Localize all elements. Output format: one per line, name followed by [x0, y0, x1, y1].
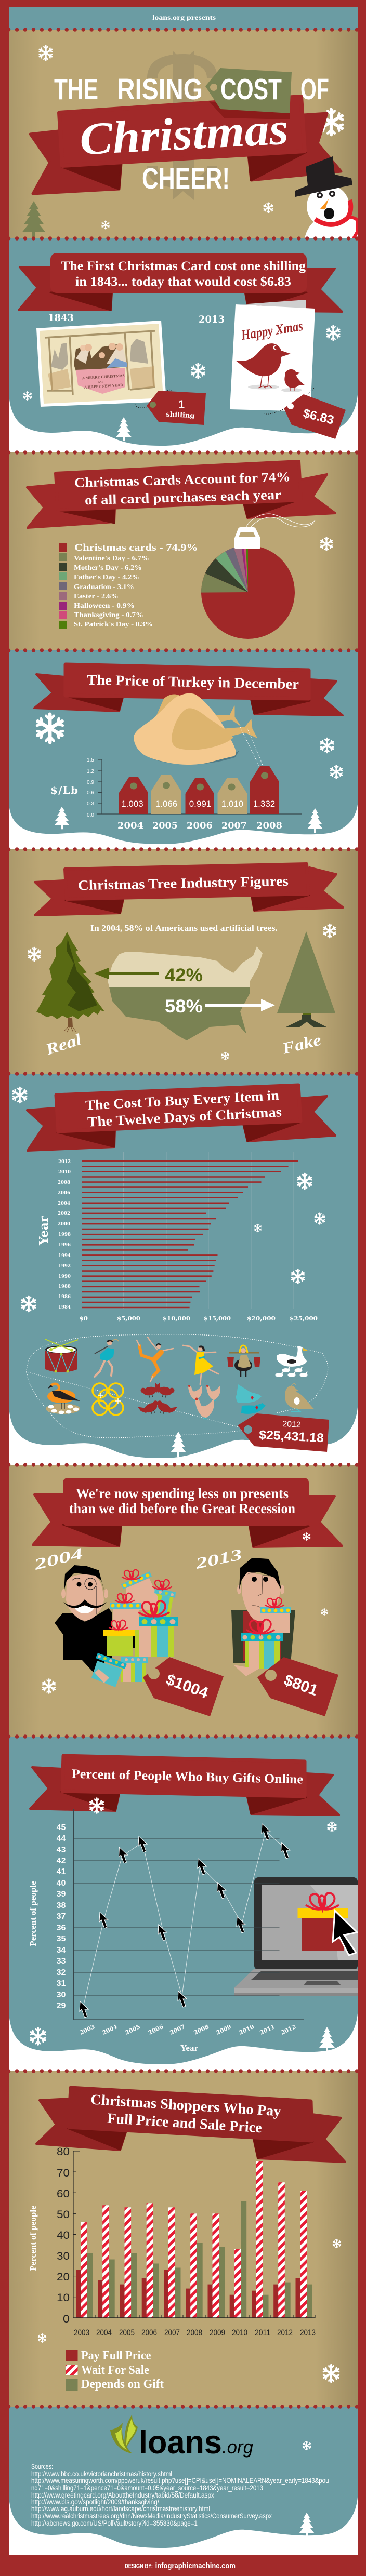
ribbon heading: of all card purchases each year: [85, 487, 281, 508]
line chart: 37: [57, 1912, 66, 1921]
icons: trees: [54, 807, 323, 833]
label: real: Real: [43, 1030, 84, 1059]
logo: loans.org: loans: [139, 2424, 222, 2461]
ribbon heading: Percent of People Who Buy Gifts Online: [72, 1767, 303, 1786]
bar chart: price tags: 0.0: [87, 812, 94, 818]
illustration: 2013 card: Happy Xmas: [240, 318, 304, 343]
snowflakes: [13, 1088, 324, 1311]
bar chart: cost by year: 2010: [58, 1169, 71, 1175]
icon: turtle doves: [236, 1384, 266, 1414]
bar chart: cost by year: 2004: [58, 1200, 70, 1206]
bar chart: cost by year: $0: [79, 1315, 88, 1322]
bar chart: shoppers: 80: [57, 2146, 70, 2158]
panel: first christmas card: [9, 238, 358, 452]
stat: 58 percent arrow: [165, 996, 275, 1017]
bar chart: cost by year: 2006: [58, 1190, 70, 1196]
snowflakes: [38, 2239, 341, 2382]
bar chart: shoppers: 40: [57, 2230, 70, 2241]
bar chart: shoppers: 2013: [300, 2328, 316, 2338]
chart legend: Thanksgiving - 0.7%: [74, 611, 143, 619]
bar chart: shoppers: 2012: [277, 2328, 293, 2338]
bar chart: price tags: 2006: [187, 821, 213, 831]
ribbon heading: The Cost To Buy Every Item in: [85, 1087, 280, 1113]
bar chart: shoppers: [28, 2146, 316, 2338]
gifts held: [233, 1598, 291, 1676]
bar chart: cost by year: $20,000: [247, 1315, 276, 1322]
bar chart: cost by year: [37, 1152, 318, 1322]
ribbon heading: We're now spending less on presents: [76, 1486, 289, 1501]
icon: gold rings: [93, 1383, 123, 1415]
snowflakes: [24, 326, 339, 400]
footer credit: [125, 2561, 236, 2570]
ribbon heading: [35, 864, 343, 915]
illustration: man 2004 with gifts: [55, 1565, 178, 1687]
sources list: http://www.ag.auburn.edu/hort/landscape/christmastreehistory.html: [31, 2505, 210, 2513]
icon: tree: [299, 2513, 315, 2538]
bar chart: cost by year: $25,000: [290, 1315, 318, 1322]
sources list: Sources:: [31, 2463, 53, 2471]
stat: 42 percent arrow: 42%: [165, 965, 203, 985]
bar chart: cost by year: 2008: [58, 1180, 70, 1185]
price tag: 25431: [238, 1413, 329, 1452]
chart legend: [66, 2349, 164, 2391]
stat: 42 percent arrow: [94, 965, 203, 985]
bar chart: shoppers: 30: [57, 2250, 70, 2262]
icon: swans: [276, 1346, 308, 1377]
icon: partridge: [285, 1383, 315, 1412]
sources list: http://www.bbc.co.uk/victorianchristmas/history.shtml: [31, 2470, 172, 2478]
icon: french hens: [188, 1385, 220, 1419]
line chart: 41: [57, 1867, 66, 1876]
snowflakes: [31, 1798, 336, 2045]
bar chart: price tags: 1.010: [221, 799, 243, 809]
pie chart: ornament: [201, 514, 315, 639]
ribbon heading: [19, 253, 342, 312]
panel: shoppers full and sale price: [9, 2071, 358, 2407]
panel: card purchases: [9, 452, 358, 650]
bar chart: price tags: 1.5: [87, 757, 94, 763]
chart legend: Depends on Gift: [81, 2378, 164, 2391]
ribbon heading: The Twelve Days of Christmas: [87, 1104, 282, 1130]
ribbon: christmas: [30, 97, 341, 194]
ribbon heading: in 1843... today that would cost $6.83: [75, 275, 291, 289]
snowflakes: [40, 46, 343, 229]
bar chart: cost by year: $5,000: [117, 1315, 140, 1322]
panel: turkey: [9, 650, 358, 849]
icon: tree: [171, 1432, 186, 1457]
line chart: 2003: [79, 2023, 96, 2036]
chart legend: Pay Full Price: [81, 2349, 151, 2363]
bar chart: price tags: 2004: [117, 821, 143, 831]
year 2004: 2004: [32, 1545, 85, 1573]
illustration: turkey: [134, 693, 265, 775]
price tag: cost: COST: [220, 73, 282, 106]
title line one: RISING: [117, 73, 203, 106]
line chart: 31: [57, 1979, 66, 1988]
christmas script: Christmas: [79, 104, 290, 165]
bar chart: shoppers: 10: [57, 2292, 70, 2304]
bar chart: cost by year: 2002: [58, 1211, 70, 1217]
title line one: [54, 73, 203, 106]
line chart: 2011: [259, 2023, 276, 2036]
bar chart: shoppers: 2011: [255, 2328, 270, 2338]
bar chart: cost by year: $15,000: [204, 1315, 231, 1322]
bar chart: price tags: 0.991: [189, 799, 211, 809]
bar chart: shoppers: 2008: [187, 2328, 202, 2338]
bar chart: cost by year: 1990: [58, 1274, 71, 1279]
line chart: 36: [57, 1924, 66, 1932]
bar chart: shoppers: 2003: [74, 2328, 89, 2338]
year 2013: 2013: [199, 314, 225, 325]
bar chart: cost by year: Year: [37, 1216, 51, 1246]
bar chart: cost by year: 1988: [58, 1284, 71, 1289]
ribbon heading: Christmas Shoppers Who Pay: [90, 2092, 282, 2120]
bar chart: shoppers: 2007: [164, 2328, 180, 2338]
chart legend: Mother's Day - 6.2%: [74, 564, 142, 572]
stat sentence: In 2004, 58% of Americans used artificial trees.: [90, 923, 278, 933]
line chart: 32: [57, 1968, 66, 1977]
line chart: 42: [57, 1857, 66, 1865]
laptop: [234, 1877, 358, 1996]
footer credit: infographicmachine.com: [155, 2561, 236, 2570]
sources list: http://abcnews.go.com/US/PollVault/story?id=355330&page=1: [31, 2519, 198, 2527]
chart legend: [59, 542, 198, 629]
line chart: 40: [57, 1879, 66, 1888]
snowflakes: [29, 924, 335, 1060]
price tag: 6.83: [264, 387, 346, 439]
price tag: 1 shilling: shilling: [166, 411, 195, 420]
stat: 58 percent arrow: 58%: [165, 996, 203, 1017]
map: united states: [108, 946, 263, 1040]
snowflake: [321, 538, 332, 550]
presenter line: loans.org presents: [152, 14, 216, 22]
sources list: http://www.greetingcard.org/AbouttheIndustry/tabid/58/Default.aspx: [31, 2491, 214, 2499]
bar chart: shoppers: 0: [63, 2313, 70, 2325]
panel: buying gifts online: [9, 1737, 358, 2071]
chart legend: Halloween - 0.9%: [74, 602, 135, 610]
illustration: 1843 card: [36, 321, 166, 407]
bar chart: cost by year: 2000: [58, 1221, 70, 1227]
illustration: fake tree: [277, 931, 335, 1027]
chart legend: Wait For Sale: [81, 2364, 149, 2377]
icon: tree: [22, 201, 46, 238]
logo: loans.org: [110, 2414, 253, 2461]
line chart: 2005: [124, 2023, 141, 2036]
bar chart: shoppers: 2009: [210, 2328, 225, 2338]
ribbon heading: Full Price and Sale Price: [107, 2111, 263, 2136]
ribbon heading: Christmas Cards Account for 74%: [74, 469, 291, 490]
snowflakes: [43, 1533, 328, 1693]
price tag: 1 shilling: 1: [178, 398, 185, 411]
line chart: 2008: [193, 2023, 210, 2036]
bar chart: shoppers: 70: [57, 2167, 70, 2179]
line chart: 38: [57, 1901, 66, 1910]
line chart: 33: [57, 1957, 66, 1966]
bar chart: shoppers: 2010: [232, 2328, 247, 2338]
chart legend: Christmas cards - 74.9%: [74, 542, 198, 553]
illustration: man 2013 with gifts: [231, 1558, 295, 1676]
line chart: 2009: [215, 2023, 232, 2036]
icon: leaper: [137, 1337, 173, 1382]
bar chart: shoppers: 60: [57, 2188, 70, 2200]
price tag: 801: $801: [282, 1672, 320, 1699]
price tag: 1004: [143, 1657, 224, 1716]
illustration: real tree: [36, 932, 104, 1032]
icon: milkmaid: [227, 1345, 260, 1377]
bar chart: cost by year: 1998: [58, 1232, 71, 1237]
bar chart: price tags: [87, 757, 302, 831]
gift stack: [92, 1570, 178, 1687]
line chart: Year: [180, 2043, 198, 2053]
price tag: 1004: $1004: [164, 1671, 211, 1702]
ribbon heading: [34, 664, 343, 715]
chart legend: Valentine's Day - 6.7%: [74, 555, 149, 563]
illustration: 1843 card: A MERRY CHRISTMAS: [82, 373, 125, 380]
bar chart: shoppers: 50: [57, 2209, 70, 2221]
ribbon heading: [30, 1756, 339, 1815]
bar chart: price tags: 0.3: [87, 801, 94, 807]
title of: OF: [300, 73, 329, 106]
icon: dancer: [183, 1345, 218, 1384]
panel: sources: [9, 2407, 358, 2555]
line chart: 29: [57, 2001, 66, 2010]
year 2013: 2013: [193, 1546, 243, 1572]
icon: calling birds: [138, 1383, 177, 1418]
ribbon heading: [36, 2088, 345, 2162]
illustration: 2013 card: [230, 300, 315, 411]
chart legend: Easter - 2.6%: [74, 593, 119, 600]
line chart: 2010: [238, 2023, 255, 2036]
bar chart: cost by year: 1992: [58, 1263, 71, 1269]
sources list: [31, 2463, 329, 2527]
bar chart: cost by year: 1994: [58, 1253, 71, 1259]
panel: christmas tree figures: [9, 849, 358, 1074]
dotted loop: [27, 1334, 328, 1438]
price tag: 25431: 2012: [282, 1420, 301, 1430]
chart legend: Graduation - 3.1%: [74, 583, 134, 591]
bar chart: price tags: 1.066: [155, 799, 177, 809]
watermark dollar: [147, 51, 217, 200]
price tag: 6.83: $6.83: [302, 406, 335, 428]
bar chart: cost by year: 1986: [58, 1294, 71, 1300]
line chart: 2012: [280, 2023, 297, 2036]
line chart: Percent of people: [28, 1881, 38, 1946]
year 1843: 1843: [48, 312, 74, 324]
icon: tree: [319, 2027, 335, 2052]
ribbon heading: Christmas Tree Industry Figures: [78, 873, 289, 893]
line chart: 44: [57, 1834, 66, 1843]
bar chart: cost by year: 1996: [58, 1242, 71, 1248]
icon: tree: [116, 417, 132, 441]
bar chart: shoppers: 2006: [141, 2328, 157, 2338]
line chart: 35: [57, 1934, 66, 1943]
icon: drum: [45, 1339, 78, 1372]
bar chart: shoppers: 20: [57, 2271, 70, 2283]
bar chart: price tags: 1.332: [253, 799, 275, 809]
header strip: [9, 7, 358, 30]
panel: twelve days: [9, 1074, 358, 1465]
line chart: [28, 1809, 304, 2053]
bar chart: price tags: 2005: [152, 821, 178, 831]
axis label: $/Lb: [50, 784, 78, 796]
bar chart: price tags: 0.9: [87, 780, 94, 785]
bar chart: shoppers: 2004: [96, 2328, 112, 2338]
icon: snowman: [295, 156, 366, 275]
ribbon heading: [33, 1478, 342, 1547]
line chart: 2006: [147, 2023, 165, 2036]
line chart: 43: [57, 1846, 66, 1854]
price tag: cost: [205, 68, 292, 113]
chart legend: Father's Day - 4.2%: [74, 573, 139, 581]
ribbon heading: The First Christmas Card cost one shilling: [61, 259, 306, 273]
ribbon heading: [27, 1085, 335, 1151]
bar chart: price tags: 1.003: [121, 799, 143, 809]
title cheer: CHEER!: [142, 162, 230, 195]
footer credit: DESIGN BY:: [125, 2562, 153, 2570]
line chart: 45: [57, 1823, 66, 1832]
price tag: 25431: $25,431.18: [258, 1428, 324, 1445]
chart legend: St. Patrick's Day - 0.3%: [74, 621, 153, 629]
bar chart: price tags: 2008: [256, 821, 282, 831]
snowflakes: [37, 714, 342, 778]
bar chart: price tags: 1.2: [87, 769, 94, 775]
bar chart: price tags: 2007: [221, 821, 247, 831]
panel: spending on presents: [9, 1465, 358, 1737]
line chart: 34: [57, 1946, 66, 1955]
bar chart: cost by year: 1984: [58, 1304, 71, 1310]
sources list: http://www.realchristmastrees.org/dnn/NewsMedia/IndustryStatistics/ConsumerSurvey.aspx: [31, 2512, 272, 2520]
title line one: THE: [54, 73, 98, 106]
line chart: 2007: [169, 2023, 186, 2036]
price tag: 801: [257, 1657, 338, 1716]
bar chart: shoppers: 2005: [119, 2328, 135, 2338]
icon: piper: [95, 1340, 119, 1377]
snowflake: [303, 2441, 310, 2450]
logo: loans.org: .org: [222, 2436, 253, 2458]
ribbon heading: [27, 461, 335, 528]
bar chart: price tags: 0.6: [87, 790, 94, 796]
bar chart: shoppers: Percent of people: [28, 2206, 38, 2271]
sources list: nd71=0&shilling71=1&pence71=0&amount=0.05&year_source=1843&year_result=2013: [31, 2484, 263, 2492]
ribbon heading: than we did before the Great Recession: [69, 1501, 295, 1516]
ribbon heading: The Price of Turkey in December: [87, 672, 299, 692]
line chart: 30: [57, 1991, 66, 1999]
sources list: http://www.bls.gov/spotlight/2009/thanksgiving/: [31, 2498, 159, 2506]
bar chart: cost by year: $10,000: [163, 1315, 190, 1322]
panel: title: [9, 30, 366, 275]
line chart: 2004: [101, 2023, 119, 2036]
price tag: 1 shilling: [136, 390, 206, 425]
bar chart: cost by year: 2012: [58, 1159, 71, 1165]
label: fake: Fake: [280, 1030, 323, 1058]
line chart: 39: [57, 1890, 66, 1899]
icon: goose: [46, 1384, 80, 1414]
illustration: 1843 card: AND: [98, 381, 104, 384]
illustration: 1843 card: A HAPPY NEW YEAR: [84, 382, 124, 390]
